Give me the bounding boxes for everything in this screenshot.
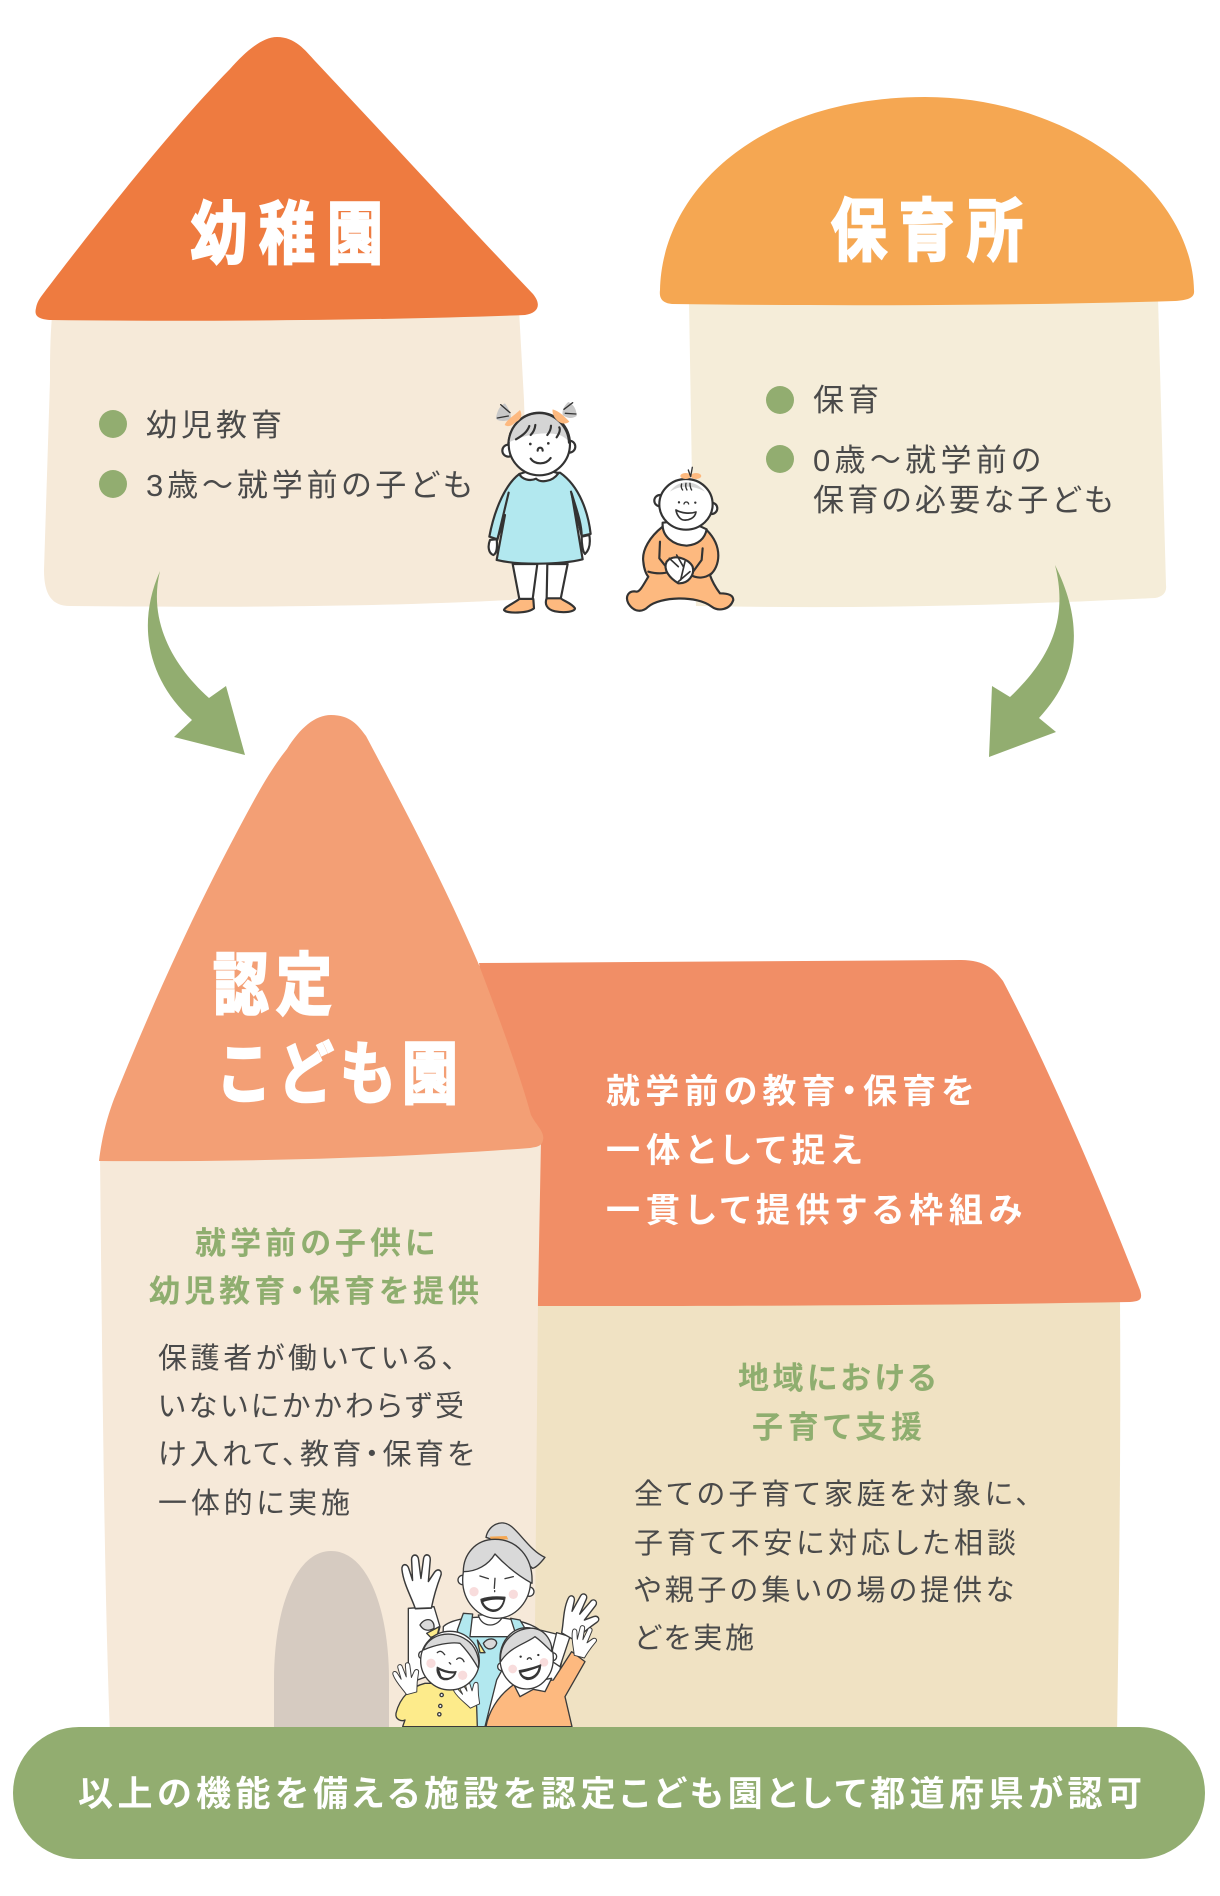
pigtail tufts (420, 1620, 434, 1630)
text: community description: 全ての子育て家庭を対象に、 (634, 1478, 1030, 1511)
roof: framework (479, 960, 1141, 1306)
arrow: 保育所 to 認定こども園 (989, 565, 1074, 757)
text: framework description: 一体として捉え (606, 1132, 862, 1170)
heading: community function (738, 1361, 936, 1445)
girl child (396, 1683, 477, 1727)
text: preschool description (158, 1342, 474, 1520)
bullet list: 保育所: 保育 (813, 383, 879, 418)
heading: preschool function: 就学前の子供に (195, 1226, 435, 1261)
wall: 保育所 (689, 298, 1166, 607)
text: preschool description: け入れて、教育・保育を (158, 1438, 474, 1471)
wall: preschool (100, 1140, 541, 1735)
banner (13, 1727, 1205, 1859)
text: framework description (606, 1073, 1022, 1230)
text: community description (634, 1478, 1030, 1655)
heading: community function: 子育て支援 (752, 1410, 922, 1445)
heading: preschool function: 幼児教育・保育を提供 (149, 1274, 479, 1309)
text: preschool description: いないにかかわらず受 (158, 1390, 464, 1423)
banner text: 以上の機能を備える施設を認定こども園として都道府県が認可 (78, 1775, 1142, 1814)
wall: 幼稚園 (44, 310, 530, 607)
door (274, 1551, 389, 1735)
heading: 保育所: 保育所 (831, 195, 1023, 270)
text: community description: や親子の集いの場の提供な (634, 1574, 1014, 1607)
roof: 保育所 (660, 97, 1194, 305)
bullet list: 幼稚園: 幼児教育 (146, 408, 282, 443)
house: 保育所 (660, 97, 1194, 607)
wall: community support (533, 1298, 1120, 1735)
text: community description: 子育て不安に対応した相談 (634, 1527, 1016, 1560)
bullet list: 幼稚園 (99, 408, 472, 503)
heading: 幼稚園: 幼稚園 (191, 198, 383, 273)
roof: 認定こども園 (99, 715, 543, 1161)
text: framework description: 一貫して提供する枠組み (606, 1192, 1022, 1230)
text: framework description: 就学前の教育・保育を (606, 1073, 974, 1111)
icon: girl in blue dress (489, 402, 591, 613)
teacher (486, 1523, 545, 1568)
house: 認定こども園 (99, 715, 1141, 1735)
bullet list: 保育所: 0歳～就学前の (813, 443, 1041, 478)
arrow: 幼稚園 to 認定こども園 (148, 571, 245, 755)
bullet list: 保育所 (766, 383, 1113, 518)
text: preschool description: 一体的に実施 (158, 1487, 350, 1520)
house: 幼稚園 (36, 37, 538, 607)
icon: teacher and two children waving (391, 1523, 606, 1727)
heading: 認定こども園 (213, 949, 458, 1113)
heading: community function: 地域における (738, 1361, 936, 1396)
text: community description: どを実施 (634, 1622, 754, 1655)
boy child (486, 1652, 585, 1727)
bullet list: 幼稚園: 3歳～就学前の子ども (146, 468, 472, 503)
icon: baby in orange romper (627, 467, 733, 611)
roof: 幼稚園 (36, 37, 538, 321)
text: preschool description: 保護者が働いている、 (158, 1342, 456, 1375)
bullet list: 保育所: 保育の必要な子ども (813, 483, 1113, 518)
heading: preschool function (149, 1226, 479, 1309)
heading: 認定こども園: 認定 (213, 949, 332, 1024)
heading: 認定こども園: こども園 (216, 1038, 458, 1113)
